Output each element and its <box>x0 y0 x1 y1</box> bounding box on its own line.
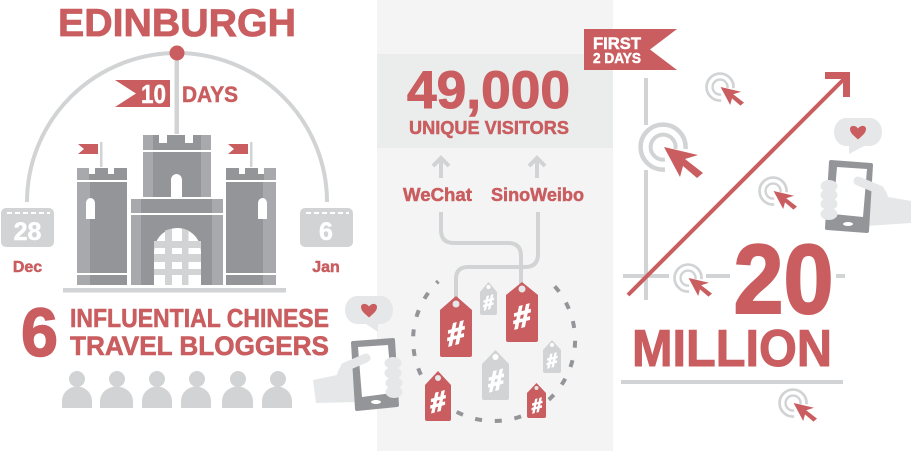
centre tower <box>143 135 211 197</box>
days label: DAYS <box>182 82 238 107</box>
icon: click bottom <box>780 390 817 422</box>
icon: grey tag right: # <box>547 350 558 373</box>
icon: click top <box>707 74 744 106</box>
flag pole <box>174 58 179 134</box>
icon: start date calendar: 28 <box>14 218 41 246</box>
right tower <box>226 168 276 285</box>
phone <box>351 338 399 411</box>
icon: red tag bottom right: # <box>532 395 543 418</box>
WeChat label: WeChat <box>403 185 472 205</box>
blogger count: 6 <box>21 294 58 371</box>
connector: WeChat to tag <box>441 212 521 292</box>
palm <box>313 361 360 403</box>
chart: growth axes <box>623 78 845 300</box>
flag: first 2 days: FIRST <box>593 34 642 53</box>
icon: red tag large left: # <box>447 313 465 353</box>
speech bubble <box>834 118 882 154</box>
baseline <box>621 380 843 384</box>
icon: red tag bottom right <box>527 383 546 418</box>
icon: red tag large left <box>440 296 472 357</box>
dashed circle <box>413 281 575 421</box>
right pennant <box>228 142 252 167</box>
left pennant <box>78 142 102 167</box>
flag: 10: 10 <box>141 79 166 109</box>
flag: first 2 days: 2 DAYS <box>593 51 641 67</box>
ground line <box>63 288 286 292</box>
icon: grey tag right <box>543 340 561 373</box>
icon: red tag bottom left: # <box>430 384 446 419</box>
timeline arc <box>27 53 327 202</box>
icon: left hand with phone <box>313 296 402 411</box>
arrow: SinoWeibo up <box>529 158 545 178</box>
arrow: growth <box>628 76 846 295</box>
reach unit: MILLION <box>632 320 832 378</box>
left tower <box>77 168 127 285</box>
blogger label line 2: TRAVEL BLOGGERS <box>70 331 329 361</box>
end month: Jan <box>312 259 340 276</box>
speech bubble <box>345 296 393 332</box>
icon: click middle <box>760 178 797 210</box>
arrow: WeChat up <box>433 158 449 178</box>
icon: start date calendar <box>1 208 54 247</box>
flag: first 2 days <box>584 29 677 70</box>
title: EDINBURGH <box>58 2 296 45</box>
panel: left Edinburgh section <box>1 2 353 408</box>
blogger label line 1: INFLUENTIAL CHINESE <box>70 303 329 333</box>
icon: red tag large right: # <box>513 296 531 336</box>
icon: end date calendar <box>300 208 353 247</box>
icons: six bloggers <box>62 371 292 408</box>
start month: Dec <box>13 259 42 276</box>
icon: red tag large right <box>506 282 538 342</box>
timeline marker <box>170 46 184 60</box>
icon: grey tag small top: # <box>483 292 494 315</box>
connector: SinoWeibo to tag <box>456 212 538 306</box>
gatehouse <box>131 199 223 285</box>
icon: castle <box>77 135 276 285</box>
icon: grey tag small top <box>480 282 497 315</box>
visitors label: UNIQUE VISITORS <box>409 117 569 138</box>
fingers <box>345 357 402 398</box>
icon: click on axis <box>675 265 712 297</box>
reach number: 20 <box>734 224 834 334</box>
flag: 10 <box>115 79 170 109</box>
icon: grey tag middle: # <box>488 363 504 399</box>
icon: click large <box>641 125 703 178</box>
icon: red tag bottom left <box>425 371 451 421</box>
panel: unique visitors band <box>377 54 613 148</box>
SinoWeibo label: SinoWeibo <box>491 185 584 205</box>
phone <box>825 160 873 233</box>
panel: centre background <box>377 0 613 451</box>
icon: right hand with phone <box>820 118 911 233</box>
palm <box>866 186 911 226</box>
fingers <box>820 180 880 220</box>
icon: end date calendar: 6 <box>319 218 333 246</box>
visitors number: 49,000 <box>407 61 570 120</box>
icon: grey tag middle <box>482 350 509 400</box>
